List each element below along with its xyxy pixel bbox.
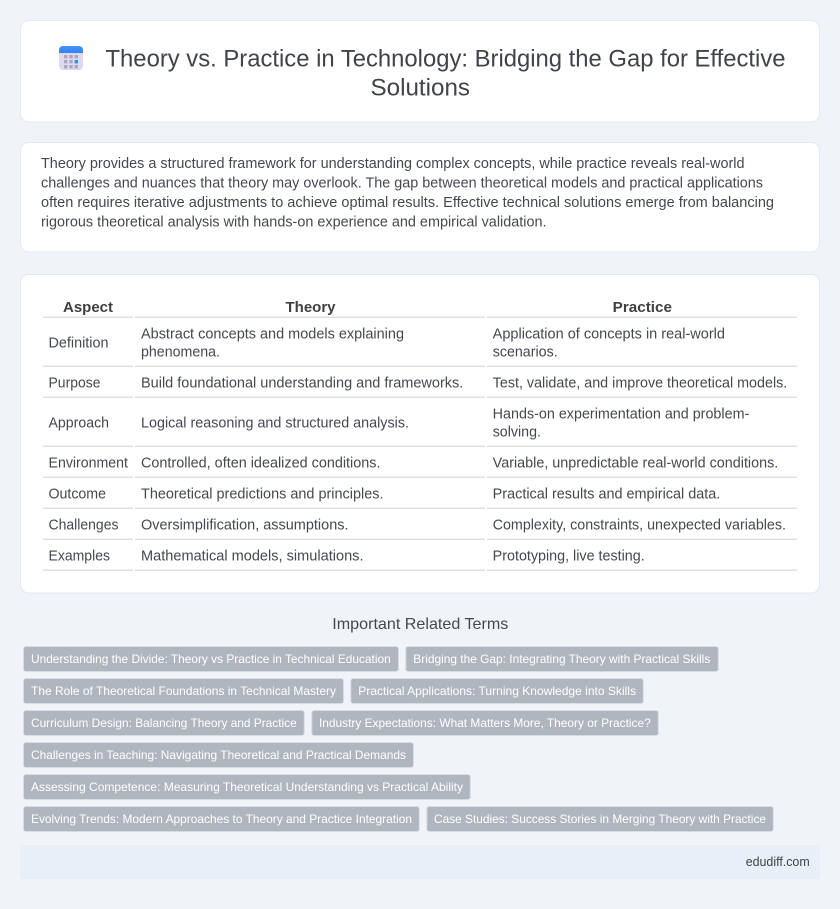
row: examples: Mathematical models, simulations. [141, 549, 364, 565]
row: examples [43, 549, 797, 571]
tag [351, 678, 643, 704]
tag [24, 774, 470, 800]
row: outcome: Outcome [48, 487, 106, 503]
table header: Practice [613, 300, 672, 316]
row: definition: Definition [48, 336, 109, 352]
panel: comparison table [20, 274, 820, 593]
table header: Aspect [63, 300, 113, 316]
tag [427, 806, 773, 832]
row: purpose: Build foundational understanding and frameworks. [141, 376, 463, 392]
row: outcome: Theoretical predictions and principles. [141, 487, 384, 503]
row: definition: Abstract concepts and models explaining [141, 327, 404, 343]
row: approach: Hands-on experimentation and problem- [493, 407, 750, 423]
row: definition: phenomena. [141, 345, 220, 361]
row: outcome [43, 487, 797, 509]
tag [406, 646, 718, 672]
table header: Theory [286, 300, 336, 316]
row: outcome: Practical results and empirical data. [493, 487, 720, 503]
icon: calendar grid [59, 46, 83, 70]
title: Theory vs. Practice in Technology: Bridging the Gap for Effective [106, 46, 786, 72]
row: approach: solving. [493, 425, 541, 441]
row: purpose: Purpose [48, 376, 101, 392]
tag: Industry Expectations: What Matters More, Theory or Practice? [319, 716, 651, 730]
row: environment: Environment [48, 456, 128, 472]
tag: Curriculum Design: Balancing Theory and Practice [31, 716, 297, 730]
description text [41, 156, 774, 230]
row: definition: scenarios. [493, 345, 558, 361]
panel: title header [20, 20, 820, 122]
description text: often requires iterative adjustments to achieve optimal results. Effective technical solutions emerge from balancing [41, 195, 774, 211]
row: challenges: Challenges [48, 518, 118, 534]
tag [24, 710, 304, 736]
related term tags [24, 646, 773, 832]
row: approach: Logical reasoning and structured analysis. [141, 416, 409, 432]
tag: Understanding the Divide: Theory vs Practice in Technical Education [31, 652, 391, 666]
panel: description [20, 142, 820, 252]
description text: challenges and nuances that theory may overlook. The gap between theoretical models and practical applications [41, 176, 763, 192]
tag: Assessing Competence: Measuring Theoretical Understanding vs Practical Ability [31, 780, 463, 794]
tag [24, 678, 344, 704]
footer [20, 845, 820, 879]
tag [24, 742, 414, 768]
description text: Theory provides a structured framework for understanding complex concepts, while practice reveals real-world [41, 156, 745, 172]
row: challenges [43, 518, 797, 540]
row: challenges: Complexity, constraints, unexpected variables. [493, 518, 786, 534]
tag: The Role of Theoretical Foundations in Technical Mastery [31, 684, 336, 698]
row: environment: Controlled, often idealized conditions. [141, 456, 380, 472]
row: environment [43, 456, 797, 478]
tag: Case Studies: Success Stories in Merging Theory with Practice [434, 812, 766, 826]
tag: Challenges in Teaching: Navigating Theoretical and Practical Demands [31, 748, 406, 762]
row: approach [43, 407, 797, 447]
table header [43, 300, 797, 318]
row: purpose [43, 376, 797, 398]
row: approach: Approach [48, 416, 109, 432]
row: definition: Application of concepts in real-world [493, 327, 725, 343]
description text: rigorous theoretical analysis with hands-on experience and empirical validation. [41, 214, 546, 230]
tag [24, 646, 398, 672]
row: examples: Examples [48, 549, 110, 565]
tag: Practical Applications: Turning Knowledge into Skills [358, 684, 636, 698]
heading: related terms: Important Related Terms [332, 616, 508, 633]
row: examples: Prototyping, live testing. [493, 549, 645, 565]
row: challenges: Oversimplification, assumptions. [141, 518, 348, 534]
tag [24, 806, 419, 832]
title: Solutions [370, 74, 470, 102]
tag: Bridging the Gap: Integrating Theory with Practical Skills [413, 652, 710, 666]
footer: edudiff.com [746, 854, 810, 869]
row: definition [43, 327, 797, 367]
tag [312, 710, 658, 736]
tag: Evolving Trends: Modern Approaches to Theory and Practice Integration [31, 812, 412, 826]
row: purpose: Test, validate, and improve theoretical models. [493, 376, 787, 392]
row: environment: Variable, unpredictable real-world conditions. [493, 456, 778, 472]
title [106, 46, 786, 102]
